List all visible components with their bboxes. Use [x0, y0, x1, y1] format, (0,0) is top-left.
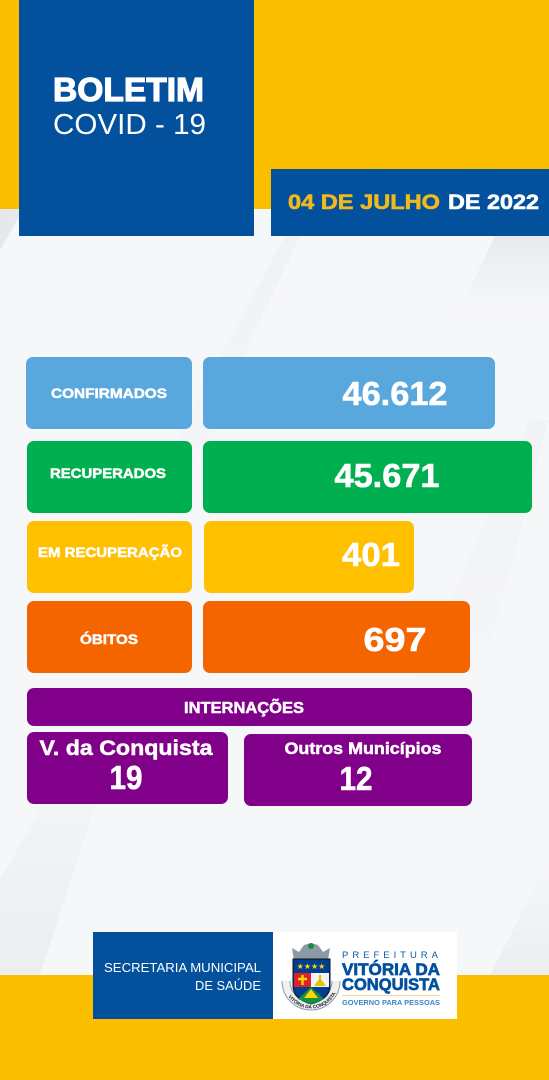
row: confirmados — [26, 357, 495, 429]
panel: outros municípios — [244, 734, 472, 806]
panel: title — [19, 0, 254, 236]
wordmark: CONQUISTA — [342, 975, 440, 994]
wordmark: PREFEITURA — [342, 950, 439, 961]
row: óbitos — [27, 601, 470, 673]
row: em recuperação: EM RECUPERAÇÃO — [38, 543, 182, 560]
panel: internações: INTERNAÇÕES — [184, 699, 304, 717]
icon: coat of arms: VITÓRIA DA CONQUISTA — [289, 992, 336, 1008]
row: recuperados — [27, 441, 532, 513]
panel: v. da conquista — [27, 732, 228, 804]
panel: internações — [27, 688, 472, 726]
wordmark: VITÓRIA DA — [342, 960, 440, 979]
icon: coat of arms — [282, 943, 340, 1010]
row: recuperados: 45.671 — [334, 457, 440, 494]
panel: date — [271, 169, 549, 236]
date text: 04 DE JULHO — [288, 191, 440, 214]
row: em recuperação: 401 — [342, 536, 400, 573]
row: óbitos: ÓBITOS — [80, 630, 138, 647]
wordmark — [342, 950, 440, 1007]
panel: v. da conquista: V. da Conquista — [40, 737, 213, 760]
footer: secretaria — [93, 932, 273, 1019]
panel: outros municípios: Outros Municípios — [284, 739, 442, 758]
panel: date: DE 2022 — [448, 191, 539, 214]
row: confirmados: 46.612 — [342, 375, 448, 412]
footer: secretaria: DE SAÚDE — [195, 978, 261, 993]
bottom yellow band — [0, 975, 549, 1080]
footer: prefeitura logo — [273, 932, 457, 1019]
panel: v. da conquista: 19 — [110, 759, 142, 796]
top yellow band — [0, 0, 549, 209]
panel: outros municípios: 12 — [340, 760, 372, 797]
footer: secretaria: SECRETARIA MUNICIPAL — [104, 960, 261, 975]
row: em recuperação — [27, 521, 414, 593]
subheading: covid: COVID - 19 — [53, 109, 206, 141]
row: recuperados: RECUPERADOS — [50, 465, 166, 481]
icon: coat of arms: ★★★★ — [297, 962, 325, 971]
row: confirmados: CONFIRMADOS — [51, 385, 167, 401]
wordmark: GOVERNO PARA PESSOAS — [342, 998, 440, 1007]
heading: boletim: BOLETIM — [53, 71, 204, 108]
row: óbitos: 697 — [364, 621, 426, 658]
